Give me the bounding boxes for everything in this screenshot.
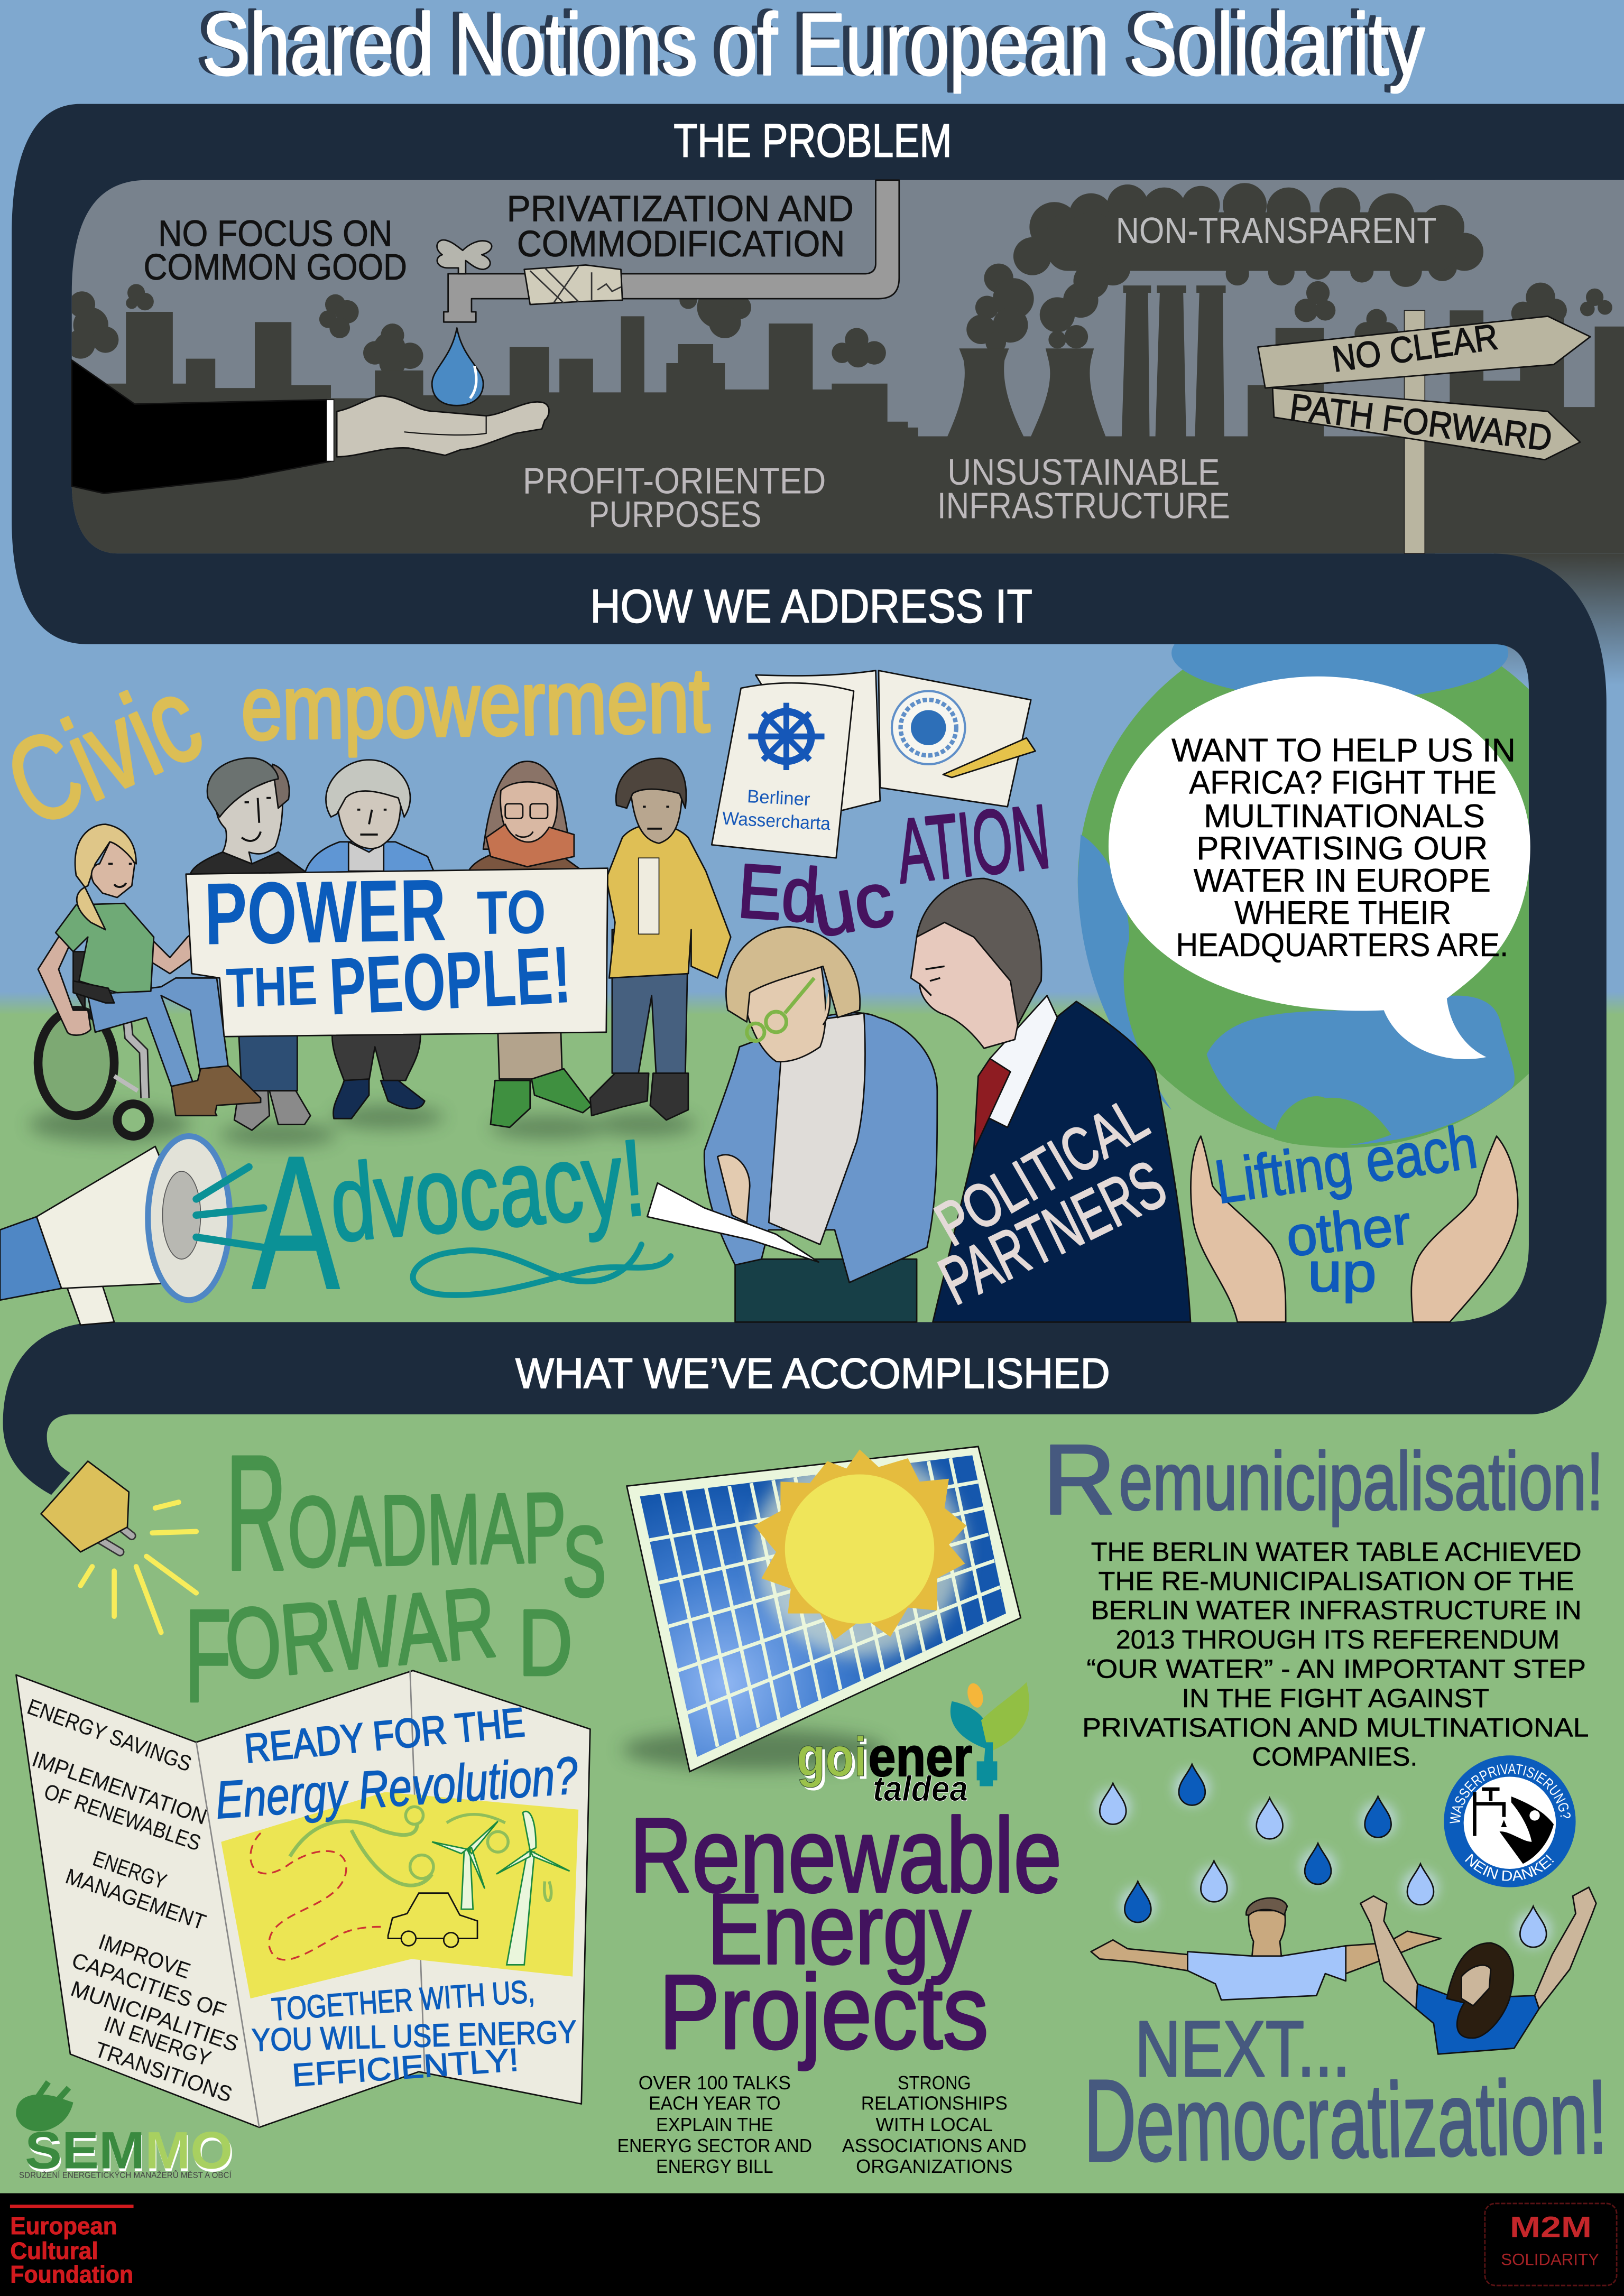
speech bubble with quote: PRIVATISING OUR: [1196, 830, 1488, 867]
text: over 100 talks: [617, 2072, 812, 2177]
hands: lifting each other up: up: [1308, 1242, 1377, 1303]
heading: next democratization: [1084, 2005, 1608, 2186]
heading: what we've accomplished: WHAT WE’VE ACCOMPLISHED: [515, 1350, 1110, 1397]
water drops: [1095, 1764, 1551, 1947]
heading: roadmaps forward: S: [562, 1505, 606, 1617]
logo: goiener taldea: ener: [869, 1726, 972, 1788]
logo: european cultural foundation: Foundation: [10, 2261, 133, 2288]
label: no focus on common good: [143, 212, 407, 288]
map illustration: [251, 1807, 570, 1965]
heading: education: uc: [805, 855, 899, 953]
heading: education: Ed: [735, 848, 822, 939]
list: leaflet services: ENERGY: [90, 1846, 170, 1894]
heading: roadmaps forward: [184, 1421, 606, 1729]
logo: semmo: SEMMO: [26, 2124, 234, 2183]
heading: roadmaps forward: ORWAR: [220, 1566, 500, 1700]
heading: next democratization: D: [1084, 2055, 1137, 2186]
person: woman in wheelchair: [38, 825, 261, 1136]
label: profit-oriented purposes: [523, 460, 826, 535]
list: leaflet services: CAPACITIES OF: [69, 1948, 229, 2023]
heading: renewable energy projects: Renewable: [630, 1797, 1062, 1914]
heading: remunicipalisation: [1042, 1423, 1603, 1535]
globe: [1077, 644, 1529, 1148]
person: politician: [911, 878, 1191, 1322]
text: berlin water table paragraph: THE BERLIN WATER TABLE ACHIEVED: [1091, 1537, 1582, 1567]
documents: water charter and blue community: Wassercharta: [722, 809, 832, 834]
list: leaflet services: MANAGEMENT: [62, 1864, 209, 1934]
heading: next democratization: NEXT...: [1135, 2005, 1350, 2093]
text: berlin water table paragraph: 2013 THROUGH ITS REFERENDUM: [1116, 1625, 1560, 1654]
logo: goiener taldea: goi: [799, 1729, 870, 1791]
text: strong relationships: [842, 2072, 1027, 2177]
text: strong relationships: STRONG: [898, 2072, 971, 2094]
text: berlin water table paragraph: PRIVATISATION AND MULTINATIONAL: [1082, 1712, 1589, 1742]
text: over 100 talks: EACH YEAR TO: [649, 2093, 780, 2114]
list: leaflet services: IMPLEMENTATION: [29, 1746, 210, 1829]
leaflet tagline: [251, 1973, 577, 2093]
hands: lifting each other up: other: [1284, 1194, 1414, 1269]
leaflet headline: READY FOR THE: [243, 1699, 527, 1772]
signpost: no clear path forward: PATH FORWARD: [1288, 386, 1554, 459]
documents: water charter and blue community: Berliner: [746, 786, 810, 810]
person: woman with scarf: [467, 761, 592, 1127]
list: leaflet services: IN ENERGY: [101, 2011, 215, 2071]
label: privatization and commodification: PRIVATIZATION AND: [506, 188, 854, 229]
banner: power to the people: TO: [476, 877, 547, 947]
signpost: no clear path forward: [1258, 310, 1590, 553]
text: strong relationships: ORGANIZATIONS: [856, 2155, 1012, 2177]
heading: remunicipalisation: R: [1042, 1423, 1116, 1535]
sun: [754, 1449, 966, 1640]
banner: power to the people: POWER: [204, 862, 447, 964]
text: berlin water table paragraph: “OUR WATER” - AN IMPORTANT STEP: [1086, 1654, 1586, 1683]
text: berlin water table paragraph: [1082, 1537, 1589, 1772]
logo: blue community: [892, 691, 965, 764]
heading: advocacy: [252, 1117, 671, 1329]
right margin shading: [1493, 553, 1624, 685]
badge: wasserprivatisierung nein danke: WASSERPRIVATISIERUNG?: [1450, 1763, 1571, 1823]
label: privatization and commodification: [506, 188, 854, 264]
speech bubble with quote: WANT TO HELP US IN: [1171, 732, 1516, 769]
heading: advocacy: A: [252, 1117, 340, 1329]
hand with sleeve: [72, 360, 549, 494]
heading: advocacy: dvocacy!: [325, 1117, 650, 1265]
list: leaflet services: MUNICIPALITIES: [68, 1976, 242, 2057]
smoke clouds and city skyline: [66, 183, 1624, 553]
banner: power to the people: PEOPLE!: [327, 930, 573, 1032]
person: woman cheering: [1360, 1887, 1596, 2054]
logo: semmo: SDRUŽENÍ ENERGETICKÝCH MANAŽERŮ MĚST A OBCÍ: [19, 2170, 232, 2180]
logo: m2m solidarity: SOLIDARITY: [1501, 2249, 1599, 2269]
hands: lifting each other up: Lifting each: [1211, 1112, 1481, 1217]
text: berlin water table paragraph: COMPANIES.: [1252, 1742, 1417, 1772]
heading: roadmaps forward: OADMAP: [287, 1471, 567, 1588]
person: woman reading: [647, 927, 937, 1322]
icon: plug: [41, 1461, 196, 1633]
label: unsustainable infrastructure: INFRASTRUCTURE: [937, 485, 1230, 526]
logo: m2m solidarity: M2M: [1510, 2211, 1592, 2244]
water drop: [432, 328, 483, 405]
heading: civic empowerment: [0, 650, 710, 853]
text: over 100 talks: ENERGY BILL: [656, 2155, 773, 2177]
text: over 100 talks: OVER 100 TALKS: [639, 2072, 791, 2094]
logo: m2m solidarity: [1485, 2204, 1617, 2285]
list: leaflet services: OF RENEWABLES: [41, 1779, 204, 1856]
text: berlin water table paragraph: BERLIN WATER INFRASTRUCTURE IN: [1091, 1596, 1582, 1625]
speech bubble with quote: [1109, 677, 1530, 1059]
pencil: [943, 738, 1035, 777]
heading: the problem: THE PROBLEM: [673, 114, 952, 166]
person: grey haired woman: [304, 760, 435, 1118]
logo: goiener taldea: [797, 1681, 1029, 1809]
heading: renewable energy projects: [630, 1797, 1062, 2071]
heading: education: ATION: [892, 786, 1054, 902]
ground shadows: [29, 1105, 696, 1146]
text: berlin water table paragraph: THE RE-MUNICIPALISATION OF THE: [1099, 1566, 1574, 1596]
list: leaflet services: [24, 1694, 242, 2107]
heading: roadmaps forward: F: [184, 1582, 232, 1729]
person: man in cap: [190, 758, 310, 1130]
heading: roadmaps forward: R: [226, 1421, 287, 1604]
leaflet headline: Energy Revolution?: [214, 1746, 580, 1830]
pipe and tap: [437, 180, 899, 322]
list: leaflet services: ENERGY SAVINGS: [24, 1694, 195, 1776]
label: no focus on common good: COMMON GOOD: [143, 246, 407, 288]
logo: european cultural foundation: Cultural: [10, 2237, 98, 2264]
leaflet headline: [214, 1699, 580, 1830]
hands: lifting each other up: [1191, 1112, 1518, 1322]
speech bubble with quote: WHERE THEIR: [1234, 895, 1451, 931]
heading: civic empowerment: empowerment: [240, 650, 710, 759]
text: over 100 talks: ENERYG SECTOR AND: [617, 2135, 812, 2156]
logo: ship wheel: [749, 703, 825, 770]
label: profit-oriented purposes: PROFIT-ORIENTED: [523, 460, 826, 502]
leaflet tagline: EFFICIENTLY!: [291, 2042, 520, 2093]
logo: goiener taldea: taldea: [873, 1770, 968, 1809]
speech bubble with quote: WATER IN EUROPE: [1194, 863, 1491, 899]
speech bubble with quote: AFRICA? FIGHT THE: [1189, 764, 1497, 801]
documents: water charter and blue community: [712, 671, 1035, 858]
logo: goiener taldea: goi: [797, 1726, 867, 1788]
speech bubble with quote: MULTINATIONALS: [1204, 798, 1485, 835]
list: leaflet services: IMPROVE: [96, 1929, 193, 1983]
banner: power to the people: [186, 862, 608, 1036]
heading: how we address it: HOW WE ADDRESS IT: [590, 580, 1032, 632]
logo: european cultural foundation: [10, 2205, 133, 2288]
person: man with open arms: [1091, 1898, 1441, 2000]
heading: renewable energy projects: Energy: [707, 1873, 971, 1985]
heading: roadmaps forward: D: [519, 1590, 573, 1695]
label: unsustainable infrastructure: [937, 451, 1230, 526]
label: political partners: PARTNERS: [928, 1146, 1177, 1319]
label: no focus on common good: NO FOCUS ON: [158, 212, 392, 254]
text: strong relationships: WITH LOCAL: [875, 2114, 993, 2135]
speech bubble with quote: HEADQUARTERS ARE.: [1176, 927, 1508, 964]
solar panel: [615, 1442, 1025, 1772]
text: strong relationships: ASSOCIATIONS AND: [842, 2135, 1027, 2156]
logo: semmo: [16, 2082, 234, 2183]
icon: megaphone: [0, 1136, 264, 1325]
banner: power to the people: THE: [225, 955, 318, 1020]
text: over 100 talks: EXPLAIN THE: [656, 2114, 773, 2135]
logo: european cultural foundation: European: [10, 2212, 117, 2239]
badge: wasserprivatisierung nein danke: NEIN DANKE!: [1465, 1854, 1554, 1881]
panel: the problem: [66, 180, 1624, 553]
label: unsustainable infrastructure: UNSUSTAINABLE: [947, 451, 1220, 493]
panel background: [72, 180, 1624, 553]
panel: what we've accomplished: [15, 1421, 1608, 2206]
person: boy in yellow coat: [590, 758, 731, 1120]
logo: semmo: SEM: [25, 2121, 145, 2180]
label: privatization and commodification: COMMODIFICATION: [517, 223, 845, 264]
label: non-transparent: NON-TRANSPARENT: [1116, 210, 1436, 251]
label: profit-oriented purposes: PURPOSES: [589, 494, 761, 535]
heading: education: [735, 786, 1054, 953]
text: strong relationships: RELATIONSHIPS: [861, 2093, 1008, 2114]
text: berlin water table paragraph: IN THE FIGHT AGAINST: [1182, 1683, 1489, 1713]
badge: wasserprivatisierung nein danke: [1444, 1755, 1576, 1887]
label: political partners: [924, 1084, 1177, 1319]
footer: [0, 2193, 1624, 2296]
label: political partners: POLITICAL: [924, 1084, 1159, 1259]
heading: renewable energy projects: Projects: [659, 1953, 989, 2071]
leaflet: energy revolution map: [16, 1671, 590, 2127]
leaflet tagline: YOU WILL USE ENERGY: [251, 2014, 577, 2058]
leaflet tagline: TOGETHER WITH US,: [270, 1973, 536, 2027]
logo: semmo: MO: [145, 2121, 233, 2180]
list: leaflet services: TRANSITIONS: [91, 2036, 235, 2107]
panel: how we address it: [0, 606, 1611, 1329]
signpost: no clear path forward: NO CLEAR: [1330, 316, 1500, 379]
serpentine band with plug cable: [3, 104, 1624, 1495]
